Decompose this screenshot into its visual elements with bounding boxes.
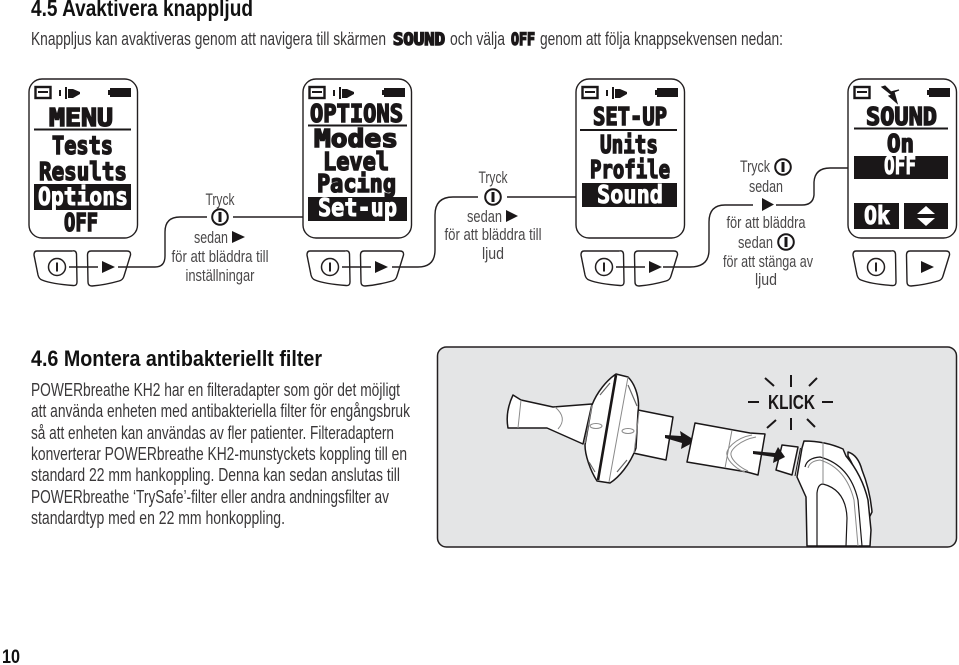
body text: filter adapter: så att enheten kan användas av fler patienter. Filteradaptern (31, 423, 394, 443)
body text: filter adapter: att använda enheten med antibakteriella filter för engångsbruk (31, 401, 411, 421)
connector and instruction 1: inställningar (186, 266, 255, 285)
connector and instruction 3: för att stänga av (723, 252, 813, 271)
body text: filter adapter (31, 380, 411, 528)
connector and instruction 1: Tryck (206, 190, 235, 209)
click label with rays: KLICK (768, 391, 815, 414)
intro sentence: och välja (450, 29, 506, 49)
body text: filter adapter: standard 22 mm hankoppling. Denna kan sedan anslutas till (31, 465, 400, 485)
connector and instruction 3 (616, 157, 848, 289)
device screen 2: options: Modes (314, 124, 398, 153)
intro sentence: Knappljus kan avaktiveras genom att navigera till skärmen (31, 29, 386, 49)
filter adapter (687, 423, 765, 475)
device screen 3: set-up: SET-UP (593, 102, 667, 131)
device screen 1: menu (29, 79, 138, 286)
body text: filter adapter: konverterar POWERbreathe KH2-munstyckets koppling till en (31, 444, 407, 464)
connector and instruction 2: sedan (467, 207, 502, 226)
device screen 3: set-up: Profile (590, 155, 670, 184)
device screen 3: set-up (576, 79, 684, 286)
mouthpiece (507, 395, 592, 444)
device screen 1: menu: Tests (52, 131, 113, 160)
connector and instruction 3: Tryck (740, 157, 770, 176)
intro sentence: OFF (511, 30, 535, 50)
device screen 2: options: Pacing (317, 169, 396, 198)
body text: filter adapter: POWERbreathe ‘TrySafe’-filter eller andra andningsfilter av (31, 487, 389, 507)
connector and instruction 2: Tryck (478, 168, 508, 187)
device screen 4: sound (848, 79, 956, 286)
intro sentence: genom att följa knappsekvensen nedan: (540, 29, 783, 49)
device screen 4: sound: Ok (864, 201, 890, 230)
connector and instruction 3: sedan (749, 177, 783, 196)
panel: filter assembly illustration (438, 347, 956, 547)
filter body (585, 374, 673, 483)
device screen 1: menu: OFF (64, 208, 98, 237)
device screen 4: sound: On (887, 129, 914, 158)
arrow: filter to adapter (665, 431, 696, 449)
device screen 2: options: Set-up (318, 193, 397, 222)
device screen 3: set-up: Units (600, 130, 658, 159)
device screen 1: menu: MENU (49, 103, 113, 132)
device screen 1: menu: Results (39, 157, 127, 186)
device screen 2: options (303, 79, 412, 286)
device screen 4: sound: SOUND (866, 102, 937, 131)
connector and instruction 2 (342, 168, 576, 267)
click label with rays (748, 375, 833, 430)
arrow: adapter to device (753, 447, 785, 463)
body text: filter adapter: POWERbreathe KH2 har en filteradapter som gör det möjligt (31, 380, 400, 400)
device screen 1: menu: Options (38, 182, 128, 211)
device screen 2: options: OPTIONS (310, 99, 403, 128)
connector and instruction 3: sedan (738, 233, 773, 252)
body text: filter adapter: standardtyp med en 22 mm honkoppling. (31, 508, 285, 528)
device screen 4: sound: OFF (884, 151, 916, 180)
device screen 3: set-up: Sound (597, 180, 663, 209)
connector and instruction 1 (69, 190, 303, 285)
handheld device (795, 441, 872, 546)
intro sentence (31, 29, 783, 50)
connector stub (776, 445, 798, 475)
intro sentence: SOUND (393, 30, 445, 50)
connector and instruction 3: ljud (755, 270, 777, 289)
device screen 2: options: Level (323, 147, 389, 176)
connector and instruction 1: sedan (194, 228, 228, 247)
connector and instruction 2: för att bläddra till (444, 225, 542, 244)
connector and instruction 2: ljud (482, 244, 504, 263)
heading: 4.6: 4.6 Montera antibakteriellt filter (31, 346, 322, 371)
connector and instruction 3: för att bläddra (726, 213, 806, 232)
connector and instruction 1: för att bläddra till (172, 247, 268, 266)
